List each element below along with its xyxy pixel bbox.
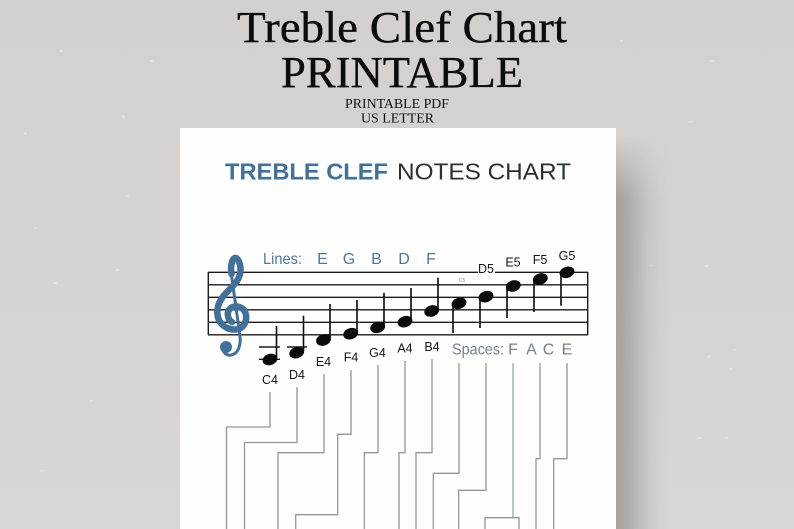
lines label: G (343, 251, 355, 268)
title: Treble Clef Chart (237, 3, 567, 52)
note names: F5 (533, 253, 547, 267)
music staff (208, 272, 588, 335)
note names: D4 (289, 368, 305, 382)
note names: G5 (559, 249, 575, 263)
chart heading (225, 158, 571, 184)
note names (262, 249, 575, 387)
lines label (263, 251, 436, 268)
spaces label: A (526, 342, 537, 358)
note names: G4 (369, 346, 386, 360)
subtitle (345, 96, 450, 126)
lines label: D (398, 251, 410, 268)
title: PRINTABLE (281, 48, 523, 97)
spaces label: Spaces: (452, 342, 504, 358)
spaces label: C (543, 342, 554, 358)
spaces label (452, 342, 572, 358)
note names: D5 (478, 262, 494, 276)
chart heading: TREBLE CLEF (225, 158, 388, 184)
page shadow (616, 146, 656, 529)
note names: B4 (424, 340, 440, 354)
note names: F4 (344, 350, 358, 364)
subtitle: US LETTER (361, 110, 434, 126)
note names: E5 (505, 256, 521, 270)
icon: treble clef (217, 258, 246, 355)
note names: E4 (316, 355, 331, 369)
title (237, 3, 567, 97)
subtitle: PRINTABLE PDF (345, 96, 450, 111)
note names: C5 (459, 278, 465, 284)
notes (261, 265, 576, 367)
leader lines (226, 359, 567, 529)
spaces label: E (562, 342, 572, 358)
chart heading: NOTES CHART (397, 158, 571, 184)
spaces label: F (508, 342, 518, 358)
lines label: B (371, 251, 382, 268)
lines label: E (317, 251, 328, 268)
note names: C4 (262, 373, 278, 387)
panel: white chart page (180, 128, 616, 529)
note names: A4 (397, 342, 413, 356)
lines label: F (426, 251, 436, 268)
lines label: Lines: (263, 251, 302, 268)
ledger lines (259, 347, 307, 359)
